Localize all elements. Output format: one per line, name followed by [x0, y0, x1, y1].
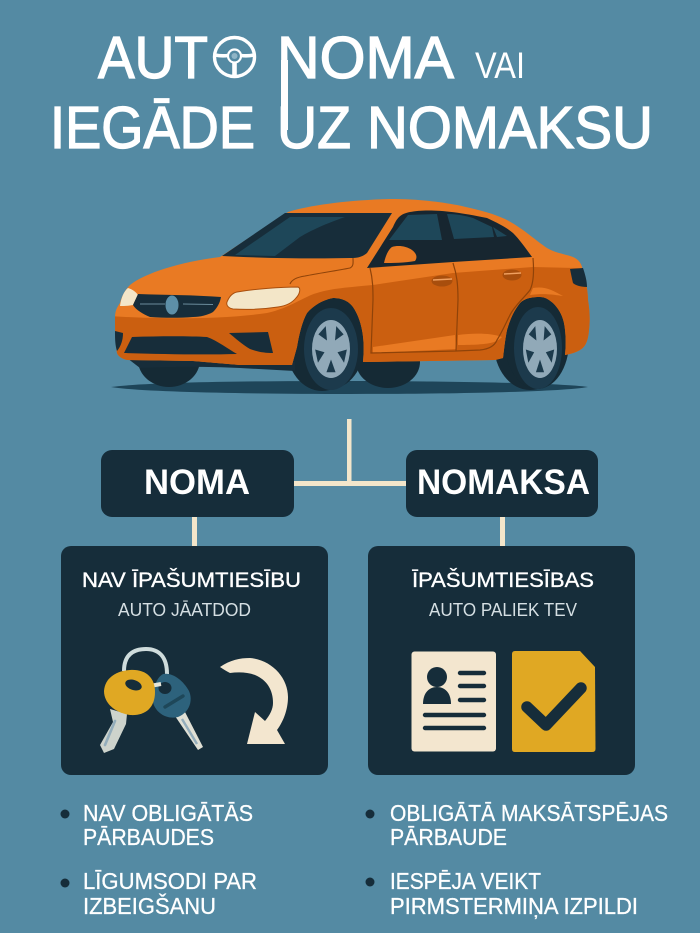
panel heading: ĪPAŠUMTIESĪBAS [412, 569, 594, 592]
near tyres inner and rims [304, 308, 358, 390]
title word: AUT (the steering wheel icon forms the O): AUT [98, 25, 208, 91]
icon: approved document [512, 651, 596, 752]
right headlight [227, 287, 300, 309]
bullet list: noma [60, 800, 257, 919]
panel subheading: AUTO PALIEK TEV [429, 600, 577, 620]
bullet text continued: IZBEIGŠANU [83, 892, 216, 919]
car body [115, 199, 590, 365]
heading box: NOMA [101, 450, 294, 517]
door handles [432, 270, 522, 286]
title word: VAI: VAI [475, 45, 525, 86]
heading box: NOMAKSA: NOMAKSA [417, 463, 590, 502]
panel: noma [61, 546, 328, 775]
bullet text: IESPĒJA VEIKT [390, 868, 541, 894]
bullet text continued: PĀRBAUDE [390, 824, 507, 850]
title [50, 25, 653, 161]
far wheels [138, 333, 420, 388]
title word: UZ: UZ [277, 95, 351, 161]
bullet dot [60, 878, 70, 888]
side windows [367, 210, 532, 268]
bullet text: NAV OBLIGĀTĀS [83, 800, 253, 826]
bullet dot [366, 878, 374, 886]
connector lines [192, 419, 505, 546]
bullet dot [366, 810, 374, 818]
bumper side vent [115, 331, 123, 351]
heading box: NOMA: NOMA [144, 463, 250, 502]
ground shadow [111, 381, 588, 394]
title word: IEGĀDE: IEGĀDE [50, 95, 255, 161]
fog vent [229, 332, 273, 353]
window panes [389, 214, 507, 240]
icon: steering wheel [214, 38, 254, 76]
bullet dot [60, 810, 70, 818]
windshield reflection [235, 217, 345, 256]
heading box: NOMAKSA [406, 450, 598, 517]
title connector stem [281, 60, 288, 130]
sill highlights [373, 334, 502, 353]
bullet list: nomaksa [366, 800, 668, 919]
door lines [370, 258, 534, 353]
underbody [127, 358, 295, 371]
title word: NOMA: NOMA [277, 25, 455, 91]
panel heading: NAV ĪPAŠUMTIESĪBU [82, 569, 301, 592]
left headlight [120, 288, 138, 306]
grille trim [140, 303, 213, 306]
bullet text: OBLIGĀTĀ MAKSĀTSPĒJAS [390, 800, 668, 826]
tail light [570, 268, 587, 287]
car illustration [105, 190, 600, 394]
hood line [290, 258, 353, 284]
windshield [222, 213, 392, 258]
panel: nomaksa [368, 546, 635, 775]
lower bumper intake [124, 336, 237, 354]
icon: return arrow [220, 658, 288, 744]
lower body shade [115, 267, 590, 365]
grille [133, 294, 221, 318]
title word: NOMAKSU: NOMAKSU [367, 95, 653, 161]
emblem [166, 296, 178, 314]
bullet text continued: PIRMSTERMIŅA IZPILDI [390, 893, 638, 919]
rear arch highlight [530, 287, 563, 296]
near tyres outer and wheel arches [286, 295, 569, 391]
bullet text continued: PĀRBAUDES [83, 824, 214, 850]
mirror [384, 246, 416, 263]
front rim [312, 320, 350, 378]
rear rim [523, 320, 557, 378]
icon: contract document [412, 652, 496, 752]
bullet text: LĪGUMSODI PAR [83, 868, 257, 894]
icon: car keys [100, 649, 203, 753]
panel subheading: AUTO JĀATDOD [118, 600, 251, 620]
